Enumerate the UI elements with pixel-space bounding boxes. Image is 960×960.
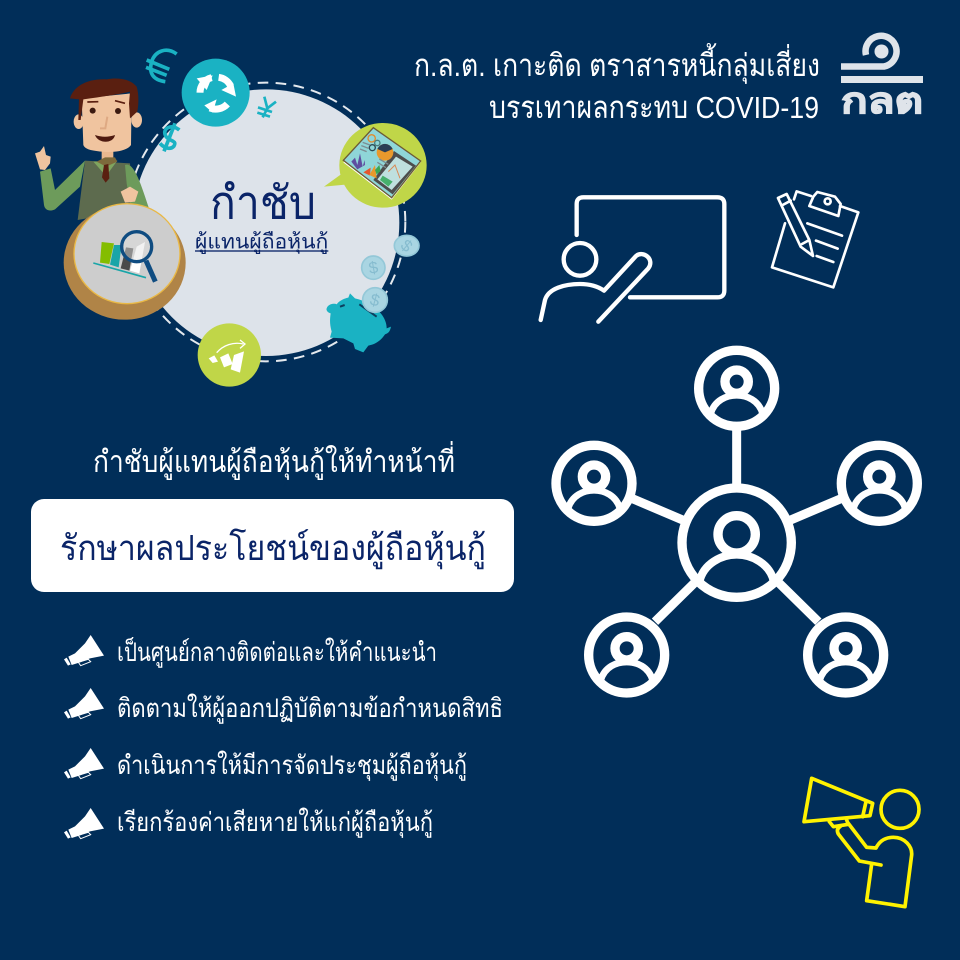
icon: piggy bank with coins: [326, 235, 419, 352]
person bottom left: [589, 617, 665, 693]
network diagram: [556, 350, 917, 693]
icon: piggy bank with coins: $: [367, 258, 380, 278]
icon: dollar: [160, 123, 179, 151]
icon: clipboard and pencil: [772, 191, 858, 287]
eyes brows nose mouth: [90, 108, 96, 114]
logo: [841, 36, 923, 121]
icon: piggy bank with coins: $: [397, 236, 416, 256]
list item 3: [64, 748, 467, 781]
icon: megaphone: [64, 688, 104, 719]
person left: [556, 445, 632, 521]
icon: megaphone: [64, 808, 104, 839]
ears and face: [74, 114, 84, 129]
icon: presenter at board: [541, 197, 724, 322]
icon: speech bubble tablet: [324, 123, 427, 208]
icon: businessman: [35, 78, 149, 220]
pale disc: [133, 89, 399, 356]
person bottom right: [808, 617, 884, 693]
callout: [31, 499, 514, 592]
dashed ring: [127, 83, 405, 361]
title: บรรเทาผลกระทบ COVID-19: [489, 90, 819, 125]
icon: recycle circle: [182, 59, 250, 127]
subheading: ผู้แทนผู้ถือหุ้นกู้: [195, 230, 328, 254]
icon: magnifier coin: [64, 204, 186, 320]
icon: megaphone: [64, 748, 104, 779]
title: ก.ล.ต. เกาะติด ตราสารหนี้กลุ่มเสี่ยง: [414, 43, 820, 85]
title: [414, 43, 820, 125]
hands: [35, 146, 51, 170]
list item 4: เรียกร้องค่าเสียหายให้แก่ผู้ถือหุ้นกู้: [117, 807, 433, 838]
icon: yen: [257, 97, 276, 117]
icon: euro: [146, 50, 177, 82]
icon: yellow person with megaphone: [804, 778, 919, 907]
person top: [699, 350, 775, 426]
icon: growth circle: [198, 323, 261, 387]
heading: กำชับ: [210, 176, 316, 228]
list item 1: เป็นศูนย์กลางติดต่อและให้คำแนะนำ: [117, 636, 437, 668]
icon: megaphone: [64, 635, 104, 666]
list item 2: ติดตามให้ผู้ออกปฏิบัติตามข้อกำหนดสิทธิ: [117, 693, 503, 724]
logo: กลต: [841, 80, 923, 121]
torso: [78, 161, 133, 220]
panel: circular illustration: [35, 50, 427, 387]
list item 1: [64, 635, 437, 668]
center person: [682, 488, 791, 597]
icon: piggy bank with coins: $: [368, 290, 382, 311]
connectors: [632, 426, 842, 622]
callout: รักษาผลประโยชน์ของผู้ถือหุ้นกู้: [60, 528, 486, 569]
intro text: กำชับผู้แทนผู้ถือหุ้นกู้ให้ทำหน้าที่: [93, 441, 455, 481]
list item 3: ดำเนินการให้มีการจัดประชุมผู้ถือหุ้นกู้: [117, 750, 467, 781]
hair: [70, 78, 138, 120]
list item 2: [64, 688, 503, 724]
person right: [841, 445, 917, 521]
